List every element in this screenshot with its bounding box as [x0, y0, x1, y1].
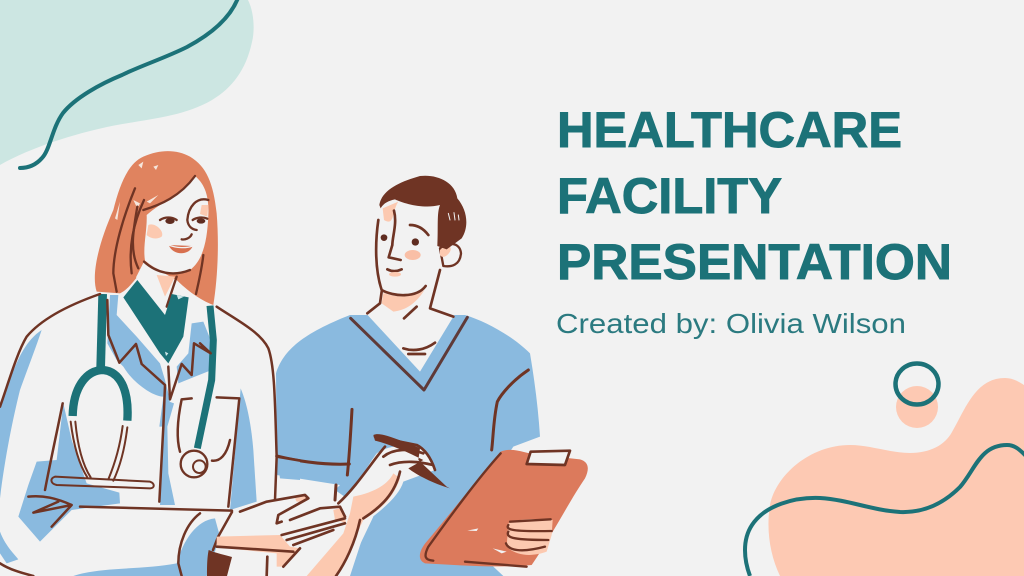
stethoscope — [73, 294, 213, 448]
top-left mint blob with wavy line — [0, 0, 254, 168]
lip highlight — [169, 245, 193, 248]
title — [557, 102, 952, 290]
wavy teal line — [745, 445, 1024, 576]
teal ring — [896, 364, 938, 404]
eyes — [381, 234, 387, 241]
coat lines — [0, 294, 300, 576]
scrub shirt — [276, 315, 540, 576]
ear — [440, 244, 461, 266]
lips — [169, 245, 193, 253]
subtitle: Created by: Olivia Wilson — [556, 308, 906, 339]
mint blob — [0, 0, 254, 165]
face — [144, 176, 208, 274]
clipboard — [420, 450, 588, 566]
decorative circle pair — [896, 364, 938, 428]
hand shape — [217, 495, 347, 552]
teal undershirt — [123, 280, 189, 363]
face lines — [367, 211, 453, 354]
neck — [136, 262, 176, 313]
hair highlights — [115, 162, 158, 220]
head — [377, 200, 458, 296]
holding hand — [507, 519, 553, 555]
neck shadow — [157, 275, 175, 297]
clipboard outline — [426, 453, 527, 567]
wavy teal line — [20, 0, 238, 168]
male nurse illustration — [276, 176, 588, 576]
sleeve lines — [277, 370, 528, 500]
peach blob — [768, 378, 1024, 576]
bottom-right peach blob with wavy line — [745, 378, 1024, 576]
title: FACILITY — [557, 168, 782, 224]
clip — [527, 451, 570, 465]
hand skin tone — [217, 496, 346, 567]
collar V outlines — [351, 317, 467, 390]
peach circle — [896, 386, 938, 428]
hair highlights — [448, 213, 459, 220]
cheeks — [147, 205, 208, 238]
arm shadow — [307, 473, 400, 576]
neck opening — [367, 314, 455, 372]
eyes — [165, 218, 175, 224]
pen — [373, 434, 450, 488]
arm lines — [336, 437, 435, 576]
finger lines — [506, 519, 552, 550]
undershirt highlights — [165, 295, 184, 356]
ear shadow — [440, 246, 451, 257]
blue coat shading — [0, 295, 300, 576]
title: PRESENTATION — [557, 234, 952, 290]
neck shadow — [382, 287, 427, 312]
cuff dark shadow — [207, 550, 232, 576]
hair — [95, 151, 218, 305]
stethoscope tubes — [51, 422, 154, 488]
writing arm — [307, 446, 435, 576]
hair — [379, 176, 466, 249]
doctor's hand — [217, 495, 347, 576]
stethoscope chest piece — [181, 451, 207, 477]
mouth blush — [389, 272, 401, 277]
highlights on clipboard — [467, 528, 507, 553]
title: HEALTHCARE — [557, 102, 902, 158]
face and hair lines — [113, 176, 208, 307]
hand lines — [217, 495, 345, 576]
female doctor illustration — [0, 151, 300, 576]
forehead shadow — [383, 202, 398, 222]
lab coat — [0, 294, 277, 576]
cheek — [405, 250, 421, 260]
